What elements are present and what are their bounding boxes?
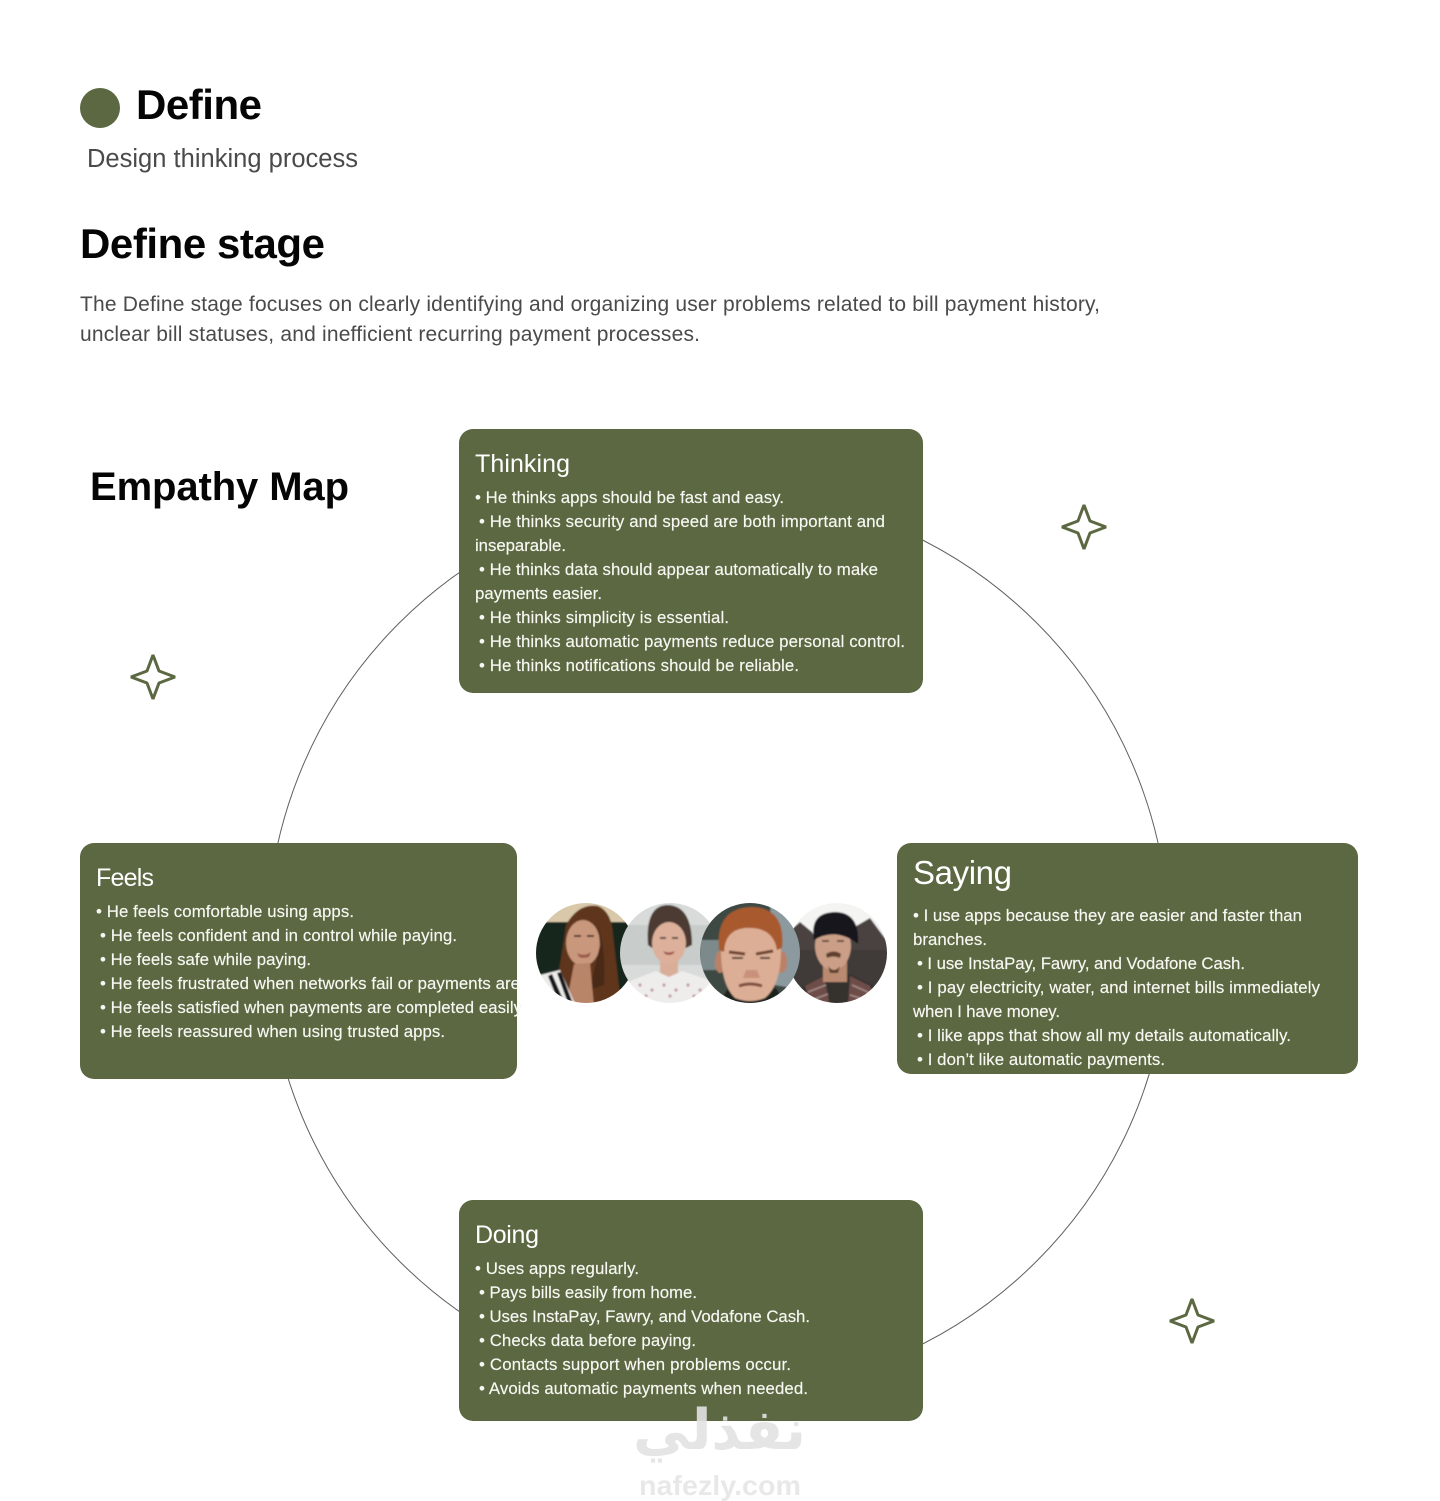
thinking list: • He thinks security and speed are both important and [479,512,885,531]
thinking list: • He thinks data should appear automatically to make [479,560,878,579]
doing list: • Checks data before paying. [479,1331,696,1350]
doing list: • Avoids automatic payments when needed. [479,1379,808,1398]
panel: Doing [459,1200,923,1421]
portrait 3: red-haired man [700,903,800,1003]
saying list: • I pay electricity, water, and internet bills immediately [917,978,1321,997]
intro paragraph [80,293,1100,346]
feels list [96,902,523,1041]
panel: Thinking [459,429,923,693]
intro paragraph: unclear bill statuses, and inefficient recurring payment processes. [80,323,700,346]
panel: Saying [897,843,1358,1074]
thinking list: • He thinks notifications should be reliable. [479,656,799,675]
feels list: • He feels comfortable using apps. [96,902,354,921]
portrait 4: man in beanie [794,903,887,1003]
thinking list [475,488,905,675]
doing list [475,1259,810,1398]
heading: Empathy Map: Empathy Map [90,465,349,509]
panel heading: Doing: Doing [475,1221,539,1249]
saying list: • I use InstaPay, Fawry, and Vodafone Cash. [917,954,1245,973]
page title: Define: Define [136,81,262,128]
panel heading: Saying: Saying [913,854,1012,891]
saying list: when I have money. [912,1002,1060,1021]
feels list: • He feels reassured when using trusted apps. [100,1022,445,1041]
portrait 2: woman in white lace [620,903,710,1003]
icon: sparkle top right [1062,505,1106,549]
panel: Feels [80,843,523,1079]
intro paragraph: The Define stage focuses on clearly identifying and organizing user problems related to bill payment history, [80,293,1100,316]
doing list: • Uses apps regularly. [475,1259,639,1278]
subtitle: Design thinking process [87,145,358,173]
portrait 1: woman with long hair [536,903,628,1003]
icon: sparkle left [131,655,175,699]
persona portraits [534,900,890,1006]
watermark: nafezly logo [633,1398,806,1501]
doing list: • Uses InstaPay, Fawry, and Vodafone Cash. [479,1307,810,1326]
feels list: • He feels confident and in control while paying. [100,926,457,945]
saying list [912,906,1321,1069]
connecting circle [267,491,1169,1393]
feels list: • He feels safe while paying. [100,950,311,969]
panel heading: Thinking: Thinking [475,450,570,478]
saying list: • I don’t like automatic payments. [917,1050,1165,1069]
stage marker dot [80,88,120,128]
doing list: • Contacts support when problems occur. [479,1355,791,1374]
thinking list: • He thinks apps should be fast and easy. [475,488,784,507]
icon: sparkle bottom right [1170,1299,1214,1343]
thinking list: • He thinks automatic payments reduce personal control. [479,632,905,651]
thinking list: payments easier. [475,584,602,603]
thinking list: • He thinks simplicity is essential. [479,608,729,627]
feels list: • He feels frustrated when networks fail or payments are [100,974,520,993]
doing list: • Pays bills easily from home. [479,1283,697,1302]
heading: Define stage: Define stage [80,220,325,267]
thinking list: inseparable. [475,536,566,555]
saying list: branches. [913,930,987,949]
feels list: • He feels satisfied when payments are completed easily [100,998,523,1017]
watermark: nafezly logo: nafezly.com [639,1470,801,1501]
panel heading: Feels: Feels [96,864,154,892]
watermark: nafezly logo: نفذلي [633,1398,806,1463]
saying list: • I use apps because they are easier and faster than [913,906,1302,925]
saying list: • I like apps that show all my details automatically. [917,1026,1291,1045]
